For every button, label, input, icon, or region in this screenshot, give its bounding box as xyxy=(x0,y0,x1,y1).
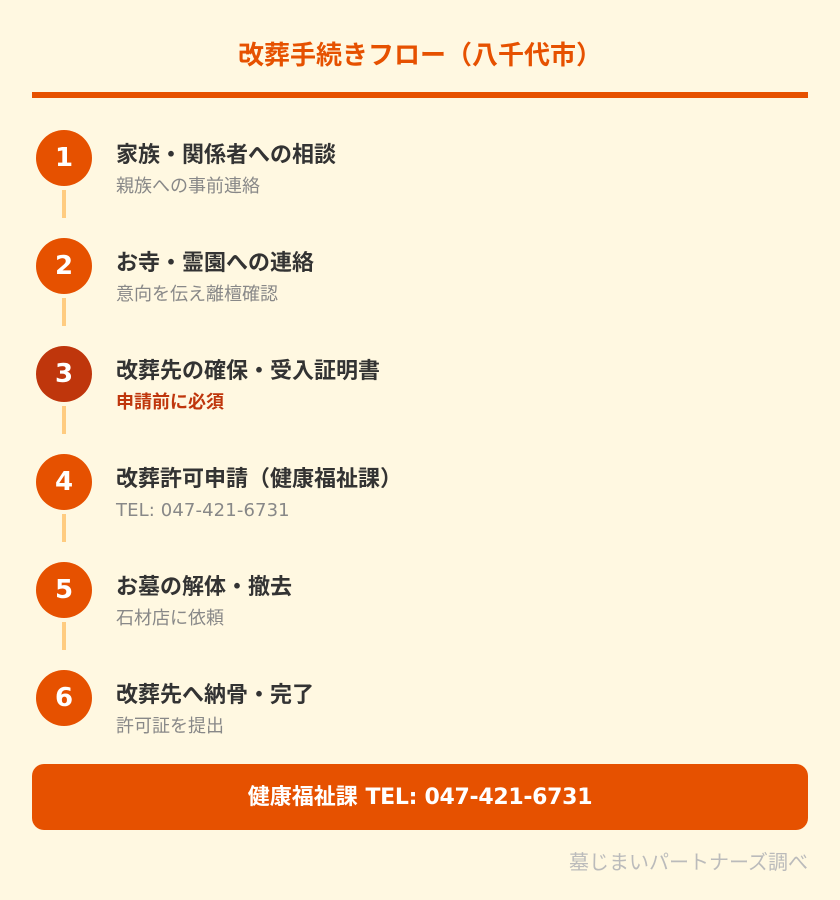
contact banner xyxy=(32,764,808,830)
step 6 note: 許可証を提出 xyxy=(116,716,224,737)
step 1 heading: 家族・関係者への相談 xyxy=(116,143,336,168)
source credit: 墓じまいパートナーズ調べ xyxy=(569,850,808,874)
step 4 heading: 改葬許可申請（健康福祉課） xyxy=(116,467,402,492)
step 2 heading: お寺・霊園への連絡 xyxy=(116,251,314,276)
step 6 heading: 改葬先へ納骨・完了 xyxy=(116,683,314,708)
step 4 xyxy=(36,454,402,542)
step 5 number: 5 xyxy=(55,575,73,605)
step 1 number: 1 xyxy=(55,143,73,173)
step 3 number xyxy=(36,346,92,402)
step 4 connector xyxy=(62,514,66,542)
step 2 note: 意向を伝え離檀確認 xyxy=(116,284,278,305)
step 3 xyxy=(36,346,380,434)
step 4 number: 4 xyxy=(55,467,73,497)
step 1 connector xyxy=(62,190,66,218)
step 1 xyxy=(36,130,336,218)
step 2 xyxy=(36,238,314,326)
contact banner: 健康福祉課 TEL: 047-421-6731 xyxy=(248,785,592,810)
step 5 note: 石材店に依頼 xyxy=(116,608,224,629)
title: 改葬手続きフロー（八千代市） xyxy=(238,41,602,71)
step 6 number: 6 xyxy=(55,683,73,713)
step 1 note: 親族への事前連絡 xyxy=(116,176,260,197)
step 3 heading: 改葬先の確保・受入証明書 xyxy=(116,359,380,384)
step 4 number xyxy=(36,454,92,510)
step 3 number: 3 xyxy=(55,359,73,389)
step 6 number xyxy=(36,670,92,726)
step 5 number xyxy=(36,562,92,618)
step 4 phone note: TEL: 047-421-6731 xyxy=(116,500,290,521)
title underline xyxy=(32,92,808,98)
step 5 heading: お墓の解体・撤去 xyxy=(116,575,292,600)
step 1 number xyxy=(36,130,92,186)
step 2 connector xyxy=(62,298,66,326)
step 6 xyxy=(36,670,314,737)
step 3 warning note: 申請前に必須 xyxy=(116,392,224,413)
step 2 number: 2 xyxy=(55,251,73,281)
step 2 number xyxy=(36,238,92,294)
step 5 connector xyxy=(62,622,66,650)
step 5 xyxy=(36,562,292,650)
step 3 connector xyxy=(62,406,66,434)
